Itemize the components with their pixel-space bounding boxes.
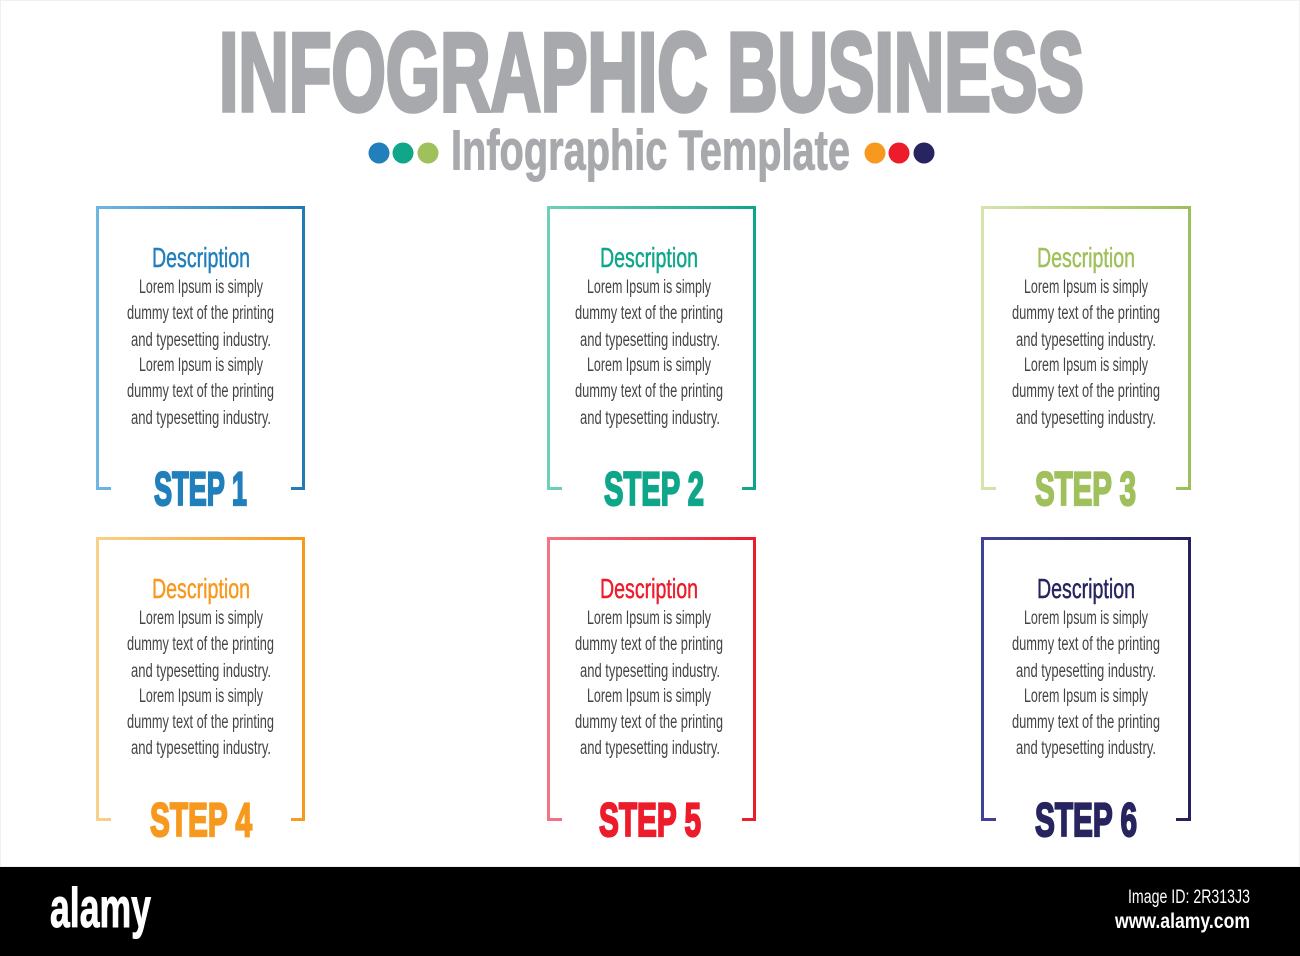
- heading: Description: [600, 242, 698, 273]
- icon: right dots: [864, 142, 934, 164]
- body text: Lorem Ipsum is simply: [1024, 355, 1148, 376]
- panel: step 3: [982, 208, 1190, 516]
- body text: and typesetting industry.: [580, 408, 720, 429]
- body text: dummy text of the printing: [1012, 303, 1160, 324]
- body text: [127, 608, 274, 759]
- panel: step 5: [548, 538, 754, 847]
- panel: step 1: [98, 208, 304, 516]
- icon: left dots: [368, 142, 438, 164]
- subtitle: Infographic Template: [451, 118, 850, 182]
- body text: Lorem Ipsum is simply: [587, 686, 711, 707]
- panel: step 6: [982, 538, 1190, 847]
- body text: Lorem Ipsum is simply: [587, 277, 711, 298]
- body text: Lorem Ipsum is simply: [139, 608, 263, 629]
- body text: dummy text of the printing: [127, 634, 274, 655]
- body text: [575, 608, 723, 759]
- body text: Lorem Ipsum is simply: [139, 355, 263, 376]
- body text: dummy text of the printing: [575, 381, 723, 402]
- panel: step 2: [548, 208, 754, 516]
- body text: dummy text of the printing: [127, 303, 274, 324]
- step label: STEP 3: [1035, 463, 1136, 516]
- frame: [98, 538, 304, 820]
- body text: and typesetting industry.: [1016, 661, 1156, 682]
- body text: and typesetting industry.: [580, 661, 720, 682]
- body text: [1012, 608, 1160, 759]
- heading: Description: [1037, 573, 1135, 604]
- step label: STEP 1: [154, 463, 247, 516]
- body text: [127, 277, 274, 429]
- body text: and typesetting industry.: [580, 330, 720, 351]
- frame: [548, 208, 754, 488]
- body text: and typesetting industry.: [1016, 408, 1156, 429]
- body text: and typesetting industry.: [131, 408, 271, 429]
- body text: dummy text of the printing: [1012, 381, 1160, 402]
- footer bar: [0, 867, 1300, 956]
- website: www.alamy.com: [1114, 910, 1250, 933]
- heading: Description: [600, 573, 698, 604]
- frame: [982, 208, 1190, 488]
- body text: Lorem Ipsum is simply: [139, 686, 263, 707]
- heading: Description: [152, 573, 250, 604]
- body text: and typesetting industry.: [131, 330, 271, 351]
- body text: and typesetting industry.: [1016, 330, 1156, 351]
- step label: STEP 6: [1035, 794, 1137, 847]
- body text: dummy text of the printing: [575, 634, 723, 655]
- frame: [982, 538, 1190, 820]
- body text: Lorem Ipsum is simply: [1024, 686, 1148, 707]
- heading: Description: [152, 242, 250, 273]
- step label: STEP 2: [604, 463, 704, 516]
- body text: dummy text of the printing: [1012, 634, 1160, 655]
- heading: Description: [1037, 242, 1135, 273]
- body text: dummy text of the printing: [575, 712, 723, 733]
- subtitle row: [368, 118, 934, 182]
- body text: dummy text of the printing: [127, 712, 274, 733]
- footer logo: alamy: [50, 876, 151, 939]
- step label: STEP 5: [599, 794, 701, 847]
- frame: [548, 538, 754, 820]
- body text: Lorem Ipsum is simply: [587, 608, 711, 629]
- body text: and typesetting industry.: [131, 661, 271, 682]
- body text: dummy text of the printing: [127, 381, 274, 402]
- panel: step 4: [98, 538, 304, 847]
- body text: Lorem Ipsum is simply: [139, 277, 263, 298]
- body text: and typesetting industry.: [131, 738, 271, 759]
- frame: [98, 208, 304, 488]
- body text: dummy text of the printing: [1012, 712, 1160, 733]
- body text: and typesetting industry.: [1016, 738, 1156, 759]
- body text: dummy text of the printing: [575, 303, 723, 324]
- body text: [1012, 277, 1160, 429]
- body text: [575, 277, 723, 429]
- body text: Lorem Ipsum is simply: [1024, 277, 1148, 298]
- body text: Lorem Ipsum is simply: [587, 355, 711, 376]
- body text: Lorem Ipsum is simply: [1024, 608, 1148, 629]
- body text: and typesetting industry.: [580, 738, 720, 759]
- image id: Image ID: 2R313J3: [1128, 887, 1250, 908]
- step label: STEP 4: [150, 794, 252, 847]
